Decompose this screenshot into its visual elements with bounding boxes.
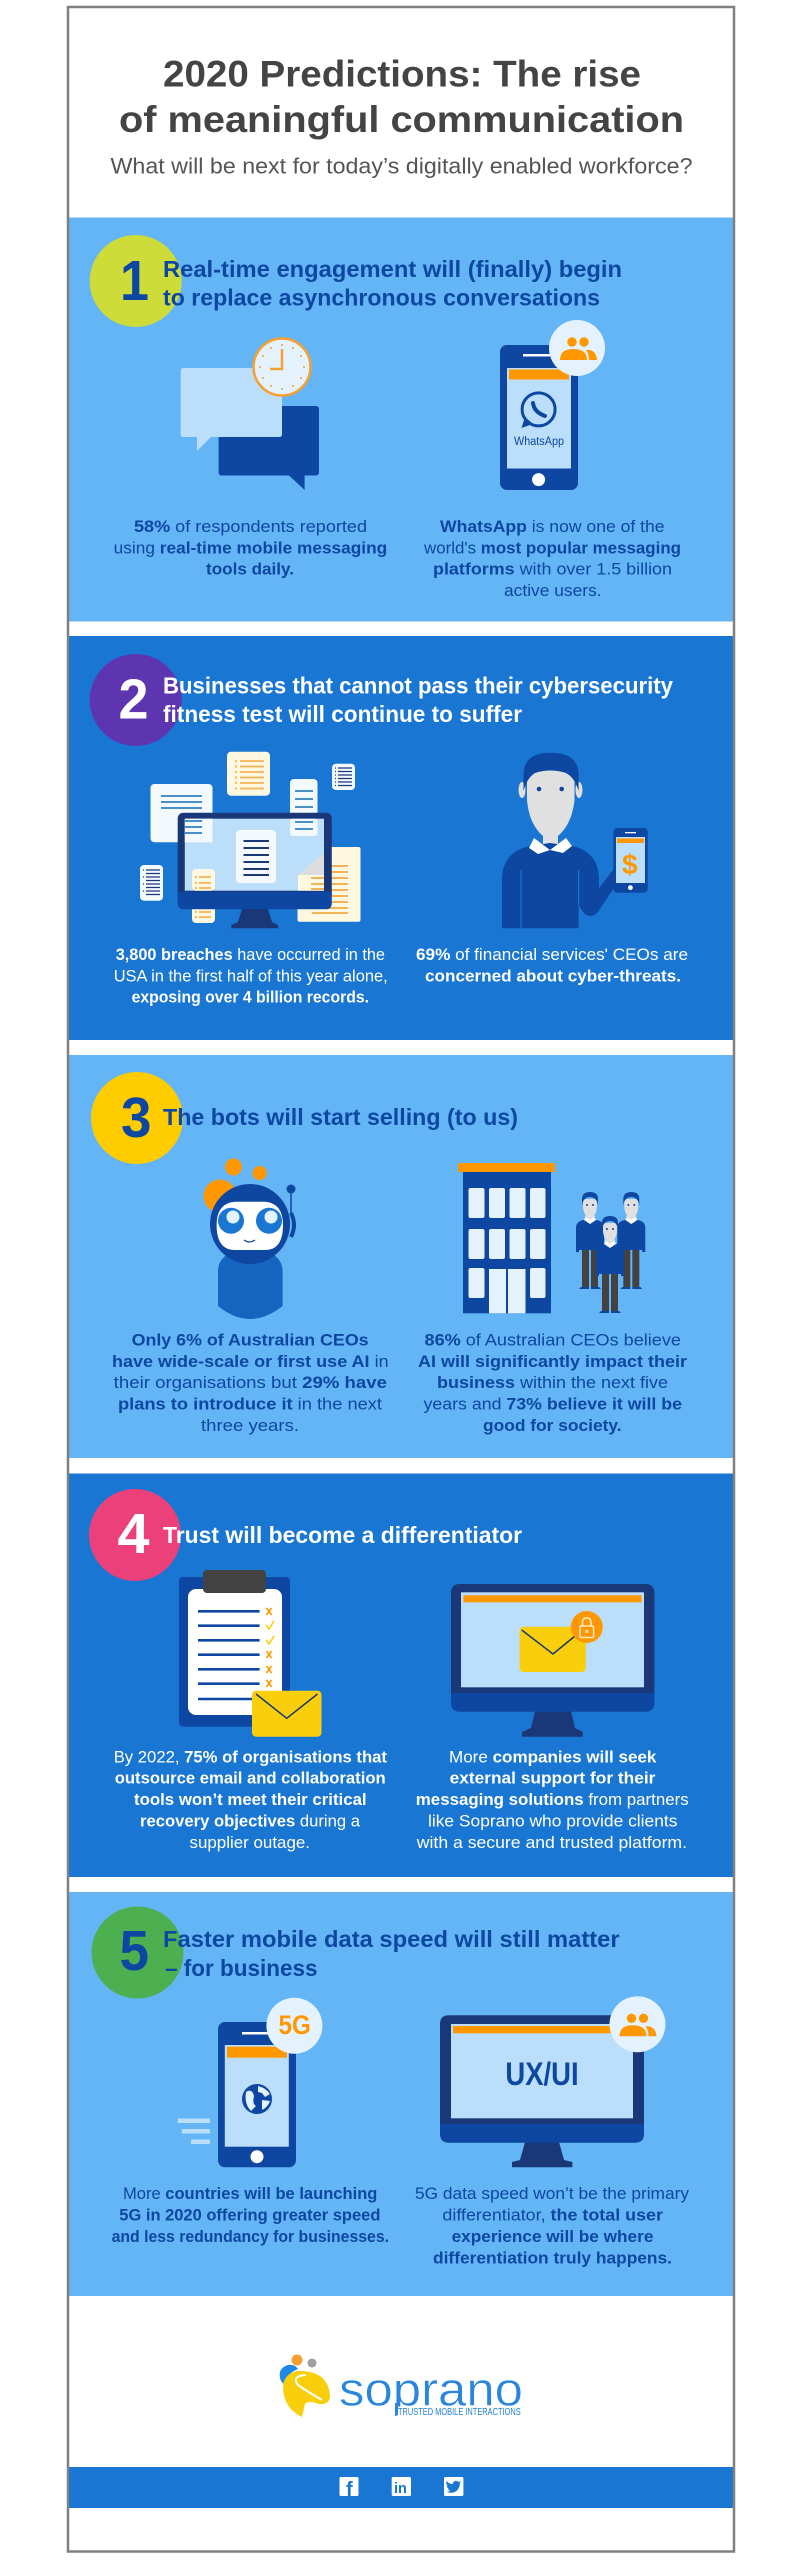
icon: UX/UI monitor	[440, 1996, 666, 2167]
icon: office building and staff	[458, 1163, 645, 1313]
text: AI adoption statistic	[112, 1331, 389, 1435]
panel background	[69, 1474, 734, 1877]
text: 58% statistic: 58% of respondents reported	[134, 517, 367, 536]
number badge 5	[92, 1906, 184, 1998]
icon: LinkedIn	[392, 2477, 411, 2497]
text: AI adoption statistic: Only 6% of Australian CEOs	[132, 1331, 369, 1350]
heading 3: The bots will start selling (to us)	[163, 1104, 518, 1130]
panel background	[69, 1892, 734, 2296]
number badge 1	[90, 235, 182, 327]
panel: prediction 4	[69, 1474, 734, 1877]
text: external support statistic: messaging solutions from partners	[416, 1790, 689, 1809]
text: user experience statistic: 5G data speed won’t be the primary	[415, 2184, 689, 2203]
text: 5G launch statistic: 5G in 2020 offering greater speed	[119, 2206, 380, 2225]
text: AI impact statistic: AI will significantly impact their	[418, 1352, 687, 1371]
page frame	[68, 7, 734, 1552]
title: 2020 Predictions: The rise	[163, 54, 641, 94]
text: outsourcing statistic	[114, 1748, 387, 1852]
text: WhatsApp statistic	[423, 517, 681, 600]
panel: prediction 2	[69, 636, 734, 1040]
text: outsourcing statistic: supplier outage.	[190, 1833, 310, 1852]
text: user experience statistic: differentiation truly happens.	[433, 2248, 672, 2267]
text: AI impact statistic: years and 73% believe it will be	[424, 1394, 682, 1414]
text: AI adoption statistic: their organisations but 29% have	[114, 1373, 387, 1392]
text: AI adoption statistic: have wide-scale or first use AI in	[112, 1352, 389, 1371]
panel: prediction 5	[69, 1892, 734, 2296]
text: AI impact statistic: 86% of Australian CEOs believe	[424, 1331, 681, 1350]
text: breaches statistic	[114, 945, 388, 1007]
heading 2: fitness test will continue to suffer	[163, 701, 522, 727]
heading 2: Businesses that cannot pass their cybersecurity	[163, 672, 673, 698]
icon: clipboard and envelope	[179, 1570, 322, 1737]
text: WhatsApp statistic: WhatsApp is now one of the	[440, 517, 665, 536]
number badge 4: 4	[118, 1502, 150, 1566]
text: 5G launch statistic	[112, 2184, 389, 2246]
icon: phone with WhatsApp: WhatsApp	[514, 436, 564, 448]
header	[110, 54, 692, 178]
heading 1: Real-time engagement will (finally) begin	[163, 256, 622, 282]
text: outsourcing statistic: recovery objectives during a	[140, 1812, 361, 1831]
text: AI adoption statistic: plans to introduce it in the next	[118, 1394, 382, 1414]
panel background	[69, 1055, 734, 1458]
icon: Twitter	[444, 2477, 463, 2496]
heading 4: Trust will become a differentiator	[163, 1522, 522, 1548]
text: CEO cyber-threat statistic	[416, 945, 688, 986]
icon: Facebook	[340, 2477, 358, 2501]
text: 58% statistic	[114, 517, 387, 579]
text: breaches statistic: USA in the first half of this year alone,	[114, 967, 388, 986]
icon: monitor with secure email	[451, 1584, 654, 1737]
text: 5G launch statistic: and less redundancy for businesses.	[112, 2227, 389, 2246]
panel background	[69, 636, 734, 1040]
number badge 5: 5	[120, 1919, 149, 1983]
text: outsourcing statistic: outsource email and collaboration	[115, 1769, 386, 1788]
text: external support statistic: external support for their	[450, 1769, 656, 1788]
text: breaches statistic: 3,800 breaches have occurred in the	[116, 945, 385, 964]
text: WhatsApp statistic: world's most popular messaging	[423, 538, 681, 558]
text: outsourcing statistic: By 2022, 75% of organisations that	[114, 1748, 387, 1767]
text: CEO cyber-threat statistic: 69% of financial services' CEOs are	[416, 945, 688, 964]
heading 1: to replace asynchronous conversations	[163, 284, 600, 310]
icon: LinkedIn: in	[394, 2481, 407, 2497]
number badge 2	[90, 654, 182, 746]
icon: UX/UI monitor: UX/UI	[505, 2056, 579, 2092]
text: CEO cyber-threat statistic: concerned about cyber-threats.	[425, 967, 681, 986]
text: 58% statistic: using real-time mobile messaging	[114, 538, 387, 558]
text: external support statistic: like Soprano who provide clients	[428, 1812, 677, 1831]
text: WhatsApp statistic: active users.	[504, 581, 602, 600]
footer social bar	[69, 2467, 734, 2508]
text: WhatsApp statistic: platforms with over 1.5 billion	[433, 560, 672, 579]
icon: phone with WhatsApp	[500, 320, 605, 490]
text: user experience statistic	[415, 2184, 689, 2267]
icon: 5G phone: 5G	[278, 2010, 311, 2040]
panel: prediction 3	[69, 1055, 734, 1458]
logo: Soprano	[280, 2354, 523, 2418]
number badge 3	[91, 1072, 183, 1164]
text: outsourcing statistic: tools won’t meet their critical	[134, 1790, 367, 1809]
icon: Facebook: f	[346, 2479, 353, 2501]
heading 5: – for business	[165, 1955, 318, 1981]
heading 2	[163, 672, 673, 727]
text: breaches statistic: exposing over 4 billion records.	[132, 988, 369, 1007]
text: AI impact statistic: business within the next five	[437, 1373, 668, 1392]
icon: chatbot	[204, 1158, 296, 1319]
heading 5	[163, 1926, 620, 1981]
icon: monitor with documents	[140, 752, 360, 928]
heading 5: Faster mobile data speed will still matter	[163, 1926, 620, 1952]
title	[119, 54, 684, 140]
icon: 5G phone	[178, 1998, 322, 2167]
heading 1	[163, 256, 622, 310]
text: AI impact statistic: good for society.	[483, 1416, 622, 1435]
icon: person holding phone: $	[622, 849, 638, 880]
text: AI adoption statistic: three years.	[201, 1416, 299, 1435]
text: external support statistic	[416, 1748, 689, 1852]
text: 58% statistic: tools daily.	[206, 560, 294, 579]
text: external support statistic: with a secure and trusted platform.	[416, 1833, 687, 1852]
panel background	[69, 218, 734, 622]
icon: person holding phone	[502, 753, 648, 928]
subtitle: What will be next for today’s digitally enabled workforce?	[110, 154, 692, 178]
text: external support statistic: More companies will seek	[449, 1748, 657, 1767]
panel: prediction 1	[69, 218, 734, 622]
text: user experience statistic: experience will be where	[452, 2227, 653, 2246]
logo: Soprano: soprano	[339, 2362, 523, 2416]
text: 5G launch statistic: More countries will be launching	[123, 2184, 377, 2203]
text: AI impact statistic	[418, 1331, 687, 1435]
number badge 3: 3	[121, 1086, 152, 1150]
number badge 4	[89, 1489, 181, 1581]
text: user experience statistic: differentiator, the total user	[442, 2206, 663, 2225]
title: of meaningful communication	[119, 99, 684, 140]
icon: chat bubbles with clock	[181, 338, 319, 490]
logo: Soprano: TRUSTED MOBILE INTERACTIONS	[398, 2407, 521, 2418]
number badge 2: 2	[118, 668, 148, 732]
number badge 1: 1	[120, 249, 149, 313]
